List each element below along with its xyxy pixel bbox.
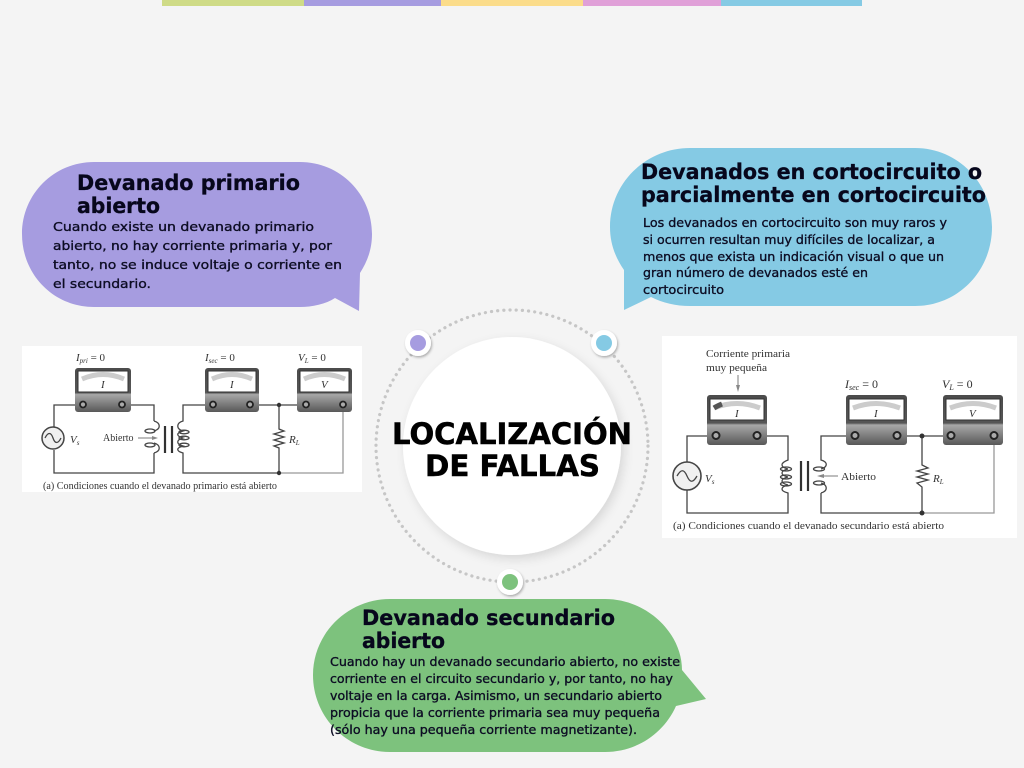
icon: AC source: [673, 462, 701, 490]
meter: I secondary: I: [873, 408, 879, 420]
circuit labels: V: [942, 377, 949, 391]
text: secundario: [330, 654, 680, 737]
meter: V load: V: [969, 408, 977, 420]
text: secundario: (sólo hay una pequeña corriente magnetizante).: [330, 722, 637, 737]
heading: cortocircuito: Devanados en cortocircuito o: [641, 160, 982, 184]
circuit labels: s: [712, 478, 715, 486]
caption: (a) Condiciones cuando el devanado primario está abierto: [43, 481, 277, 492]
dotted ring: [376, 310, 648, 582]
circuit labels: I: [205, 352, 209, 364]
circuit labels: Abierto: [841, 472, 876, 483]
circuit labels: V: [298, 352, 305, 364]
circuit diagram: primary open: [22, 346, 362, 492]
circuit labels: = 0: [309, 352, 326, 364]
heading: secundario: abierto: [362, 629, 445, 653]
circuit labels: L: [939, 478, 944, 486]
panel: devanados en cortocircuito: [610, 148, 992, 310]
circuit labels: = 0: [859, 377, 878, 391]
text: secundario: voltaje en la carga. Asimismo, un secundario abierto: [330, 688, 662, 703]
heading: cortocircuito: parcialmente en cortocircuito: [641, 183, 986, 207]
circuit labels: sec: [209, 357, 219, 365]
circuit labels: Abierto: [103, 433, 134, 444]
caption: (a) Condiciones cuando el devanado secundario está abierto: [673, 521, 944, 532]
circuit labels: = 0: [88, 352, 106, 364]
heading: primario: abierto: [77, 194, 160, 218]
text: cortocircuito: Los devanados en cortocircuito son muy raros y: [643, 215, 948, 230]
title: DE FALLAS: [425, 449, 600, 483]
circuit labels: R: [933, 473, 940, 485]
circuit labels: I: [845, 377, 849, 391]
text: cortocircuito: si ocurren resultan muy difíciles de localizar, a: [643, 232, 935, 247]
central circle with title: [392, 337, 632, 555]
text: cortocircuito: gran número de devanados esté en: [643, 265, 868, 280]
wiring: [687, 375, 994, 516]
circuit labels: V: [705, 473, 712, 485]
text: secundario: propicia que la corriente primaria sea muy pequeña: [330, 705, 660, 720]
title: [392, 417, 632, 483]
circuit labels: = 0: [954, 377, 973, 391]
node: blue: [591, 330, 617, 356]
speech bubble: blue: [610, 148, 992, 310]
meter: I secondary: [846, 395, 907, 445]
speech bubble: green: [313, 599, 706, 752]
text: cortocircuito: [643, 215, 948, 297]
speech bubble: purple: [22, 162, 372, 311]
circuit labels: L: [304, 357, 309, 365]
heading: cortocircuito: [641, 160, 986, 207]
circuit labels: R: [289, 434, 296, 446]
node: purple: [405, 330, 431, 356]
circuit labels: [705, 349, 973, 486]
meter: V load: [297, 368, 352, 412]
meter: V load: [943, 395, 1003, 445]
text: primario: el secundario.: [53, 276, 151, 291]
text: cortocircuito: menos que exista un indicación visual o que un: [643, 249, 944, 264]
circuit labels: [70, 352, 326, 447]
meter: I primary: I: [734, 408, 740, 420]
circuit labels: sec: [849, 383, 860, 392]
circuit labels: L: [295, 439, 300, 447]
text: secundario: Cuando hay un devanado secundario abierto, no existe: [330, 654, 680, 669]
circuit diagram: secondary open: [662, 336, 1017, 538]
meter: I secondary: [205, 368, 259, 412]
circuit labels: Corriente primaria: [706, 349, 791, 360]
text: primario: Cuando existe un devanado primario: [53, 219, 314, 234]
circuit labels: = 0: [218, 352, 235, 364]
title: LOCALIZACIÓN: [392, 417, 632, 451]
meter: I secondary: I: [229, 379, 235, 391]
panel: devanado secundario abierto: [313, 599, 706, 752]
heading: primario: [77, 171, 300, 218]
text: primario: [53, 219, 342, 291]
heading: primario: Devanado primario: [77, 171, 300, 195]
circuit labels: pri: [79, 357, 88, 365]
wiring: [54, 403, 343, 475]
text: secundario: corriente en el circuito secundario y, por tanto, no hay: [330, 671, 674, 686]
heading: secundario: [362, 606, 615, 653]
text: cortocircuito: cortocircuito: [643, 282, 724, 297]
text: primario: abierto, no hay corriente primaria y, por: [53, 238, 333, 253]
circuit labels: L: [948, 383, 954, 392]
circuit labels: V: [70, 434, 77, 446]
node: green: [497, 569, 523, 595]
text: primario: tanto, no se induce voltaje o corriente en: [53, 257, 342, 272]
meter: V load: V: [321, 379, 329, 391]
panel: devanado primario abierto: [22, 162, 372, 311]
top colour strip: [162, 0, 862, 6]
meter: I primary: [707, 395, 767, 445]
circuit labels: s: [77, 439, 80, 447]
meter: I primary: [75, 368, 131, 412]
circuit labels: I: [76, 352, 80, 364]
circuit labels: muy pequeña: [706, 363, 768, 374]
meter: I primary: I: [100, 379, 106, 391]
icon: AC source: [42, 427, 64, 449]
heading: secundario: Devanado secundario: [362, 606, 615, 630]
